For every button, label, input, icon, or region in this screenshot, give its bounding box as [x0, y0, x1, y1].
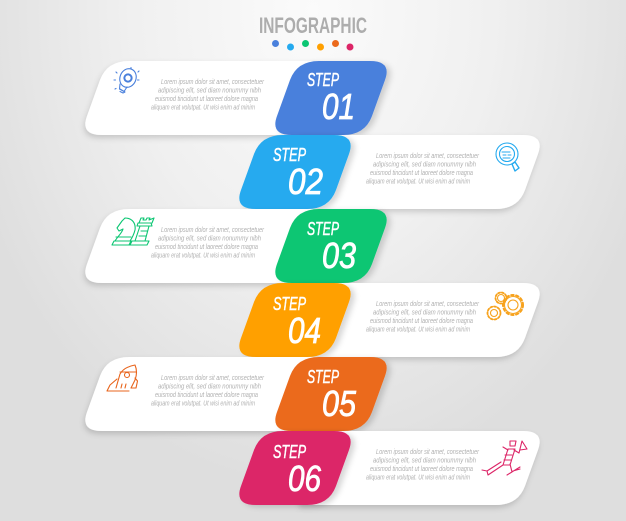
- step badge 1: 01: [322, 86, 355, 127]
- step badge 5: 05: [322, 383, 357, 424]
- card 2: [300, 135, 540, 209]
- description text 3: adipiscing elit, sed diam nonummy nibh: [158, 234, 261, 242]
- step badge 3: [275, 209, 387, 283]
- step badge 3: STEP: [307, 219, 339, 239]
- step badge 3: 03: [322, 235, 356, 276]
- description text 5: adipiscing elit, sed diam nonummy nibh: [158, 382, 261, 390]
- description text 4: [366, 299, 479, 334]
- description text 3: [151, 225, 264, 260]
- description text 6: adipiscing elit, sed diam nonummy nibh: [373, 456, 476, 464]
- step badge 5: [275, 357, 387, 431]
- icon: light bulb: [114, 66, 139, 93]
- description text 3: euismod tincidunt ut laoreet dolore magna: [155, 242, 258, 251]
- description text 5: Lorem ipsum dolor sit amet, consectetuer: [161, 373, 264, 382]
- description text 6: Lorem ipsum dolor sit amet, consectetuer: [376, 447, 479, 456]
- description text 5: [151, 373, 264, 408]
- description text 1: aliquam erat volutpat. Ut wisi enim ad minim: [151, 102, 255, 112]
- step badge 6: [239, 431, 351, 505]
- description text 4: euismod tincidunt ut laoreet dolore magna: [370, 316, 473, 325]
- step badge 2: 02: [288, 161, 323, 202]
- description text 2: euismod tincidunt ut laoreet dolore magna: [370, 168, 473, 177]
- card 1: [85, 61, 320, 135]
- step badge 6: 06: [288, 458, 322, 499]
- description text 3: aliquam erat volutpat. Ut wisi enim ad minim: [151, 250, 255, 260]
- step badge 5: STEP: [307, 367, 339, 387]
- step badge 4: STEP: [273, 294, 306, 314]
- card 4: [300, 283, 540, 357]
- step badge 4: [239, 283, 351, 357]
- description text 4: Lorem ipsum dolor sit amet, consectetuer: [376, 299, 479, 308]
- description text 4: aliquam erat volutpat. Ut wisi enim ad minim: [366, 324, 470, 334]
- card 5: [85, 357, 320, 431]
- step badge 2: STEP: [273, 145, 306, 165]
- step badge 1: STEP: [307, 70, 339, 90]
- description text 6: [366, 447, 479, 482]
- description text 3: Lorem ipsum dolor sit amet, consectetuer: [161, 225, 264, 234]
- description text 1: euismod tincidunt ut laoreet dolore magna: [155, 94, 258, 103]
- icon: magnifier: [496, 143, 519, 171]
- step badge 4: 04: [288, 310, 321, 351]
- icon: chess pieces: [112, 218, 154, 245]
- step badge 2: [239, 135, 351, 209]
- panel: step 1: [85, 61, 387, 135]
- step badge 1: [275, 61, 387, 135]
- card 6: [300, 431, 540, 505]
- description text 6: aliquam erat volutpat. Ut wisi enim ad minim: [366, 472, 470, 482]
- description text 2: aliquam erat volutpat. Ut wisi enim ad minim: [366, 176, 470, 186]
- colored dots: [272, 40, 354, 50]
- icon: rocket: [107, 365, 138, 391]
- panel: step 3: [85, 209, 387, 283]
- title: INFOGRAPHIC: [259, 13, 367, 38]
- description text 5: euismod tincidunt ut laoreet dolore magna: [155, 390, 258, 399]
- card 3: [85, 209, 320, 283]
- description text 1: adipiscing elit, sed diam nonummy nibh: [158, 86, 261, 94]
- description text 1: Lorem ipsum dolor sit amet, consectetuer: [161, 77, 264, 86]
- panel: step 4: [239, 283, 540, 357]
- description text 2: adipiscing elit, sed diam nonummy nibh: [373, 160, 476, 168]
- description text 5: aliquam erat volutpat. Ut wisi enim ad minim: [151, 398, 255, 408]
- description text 6: euismod tincidunt ut laoreet dolore magna: [370, 464, 473, 473]
- description text 2: Lorem ipsum dolor sit amet, consectetuer: [376, 151, 479, 160]
- description text 1: [151, 77, 264, 112]
- panel: step 6: [239, 431, 540, 505]
- description text 2: [366, 151, 479, 186]
- panel: step 2: [239, 135, 540, 209]
- panel: step 5: [85, 357, 387, 431]
- step badge 6: STEP: [273, 442, 306, 462]
- description text 4: adipiscing elit, sed diam nonummy nibh: [373, 308, 476, 316]
- icon: climber with flag: [482, 441, 527, 475]
- icon: gears: [488, 292, 523, 320]
